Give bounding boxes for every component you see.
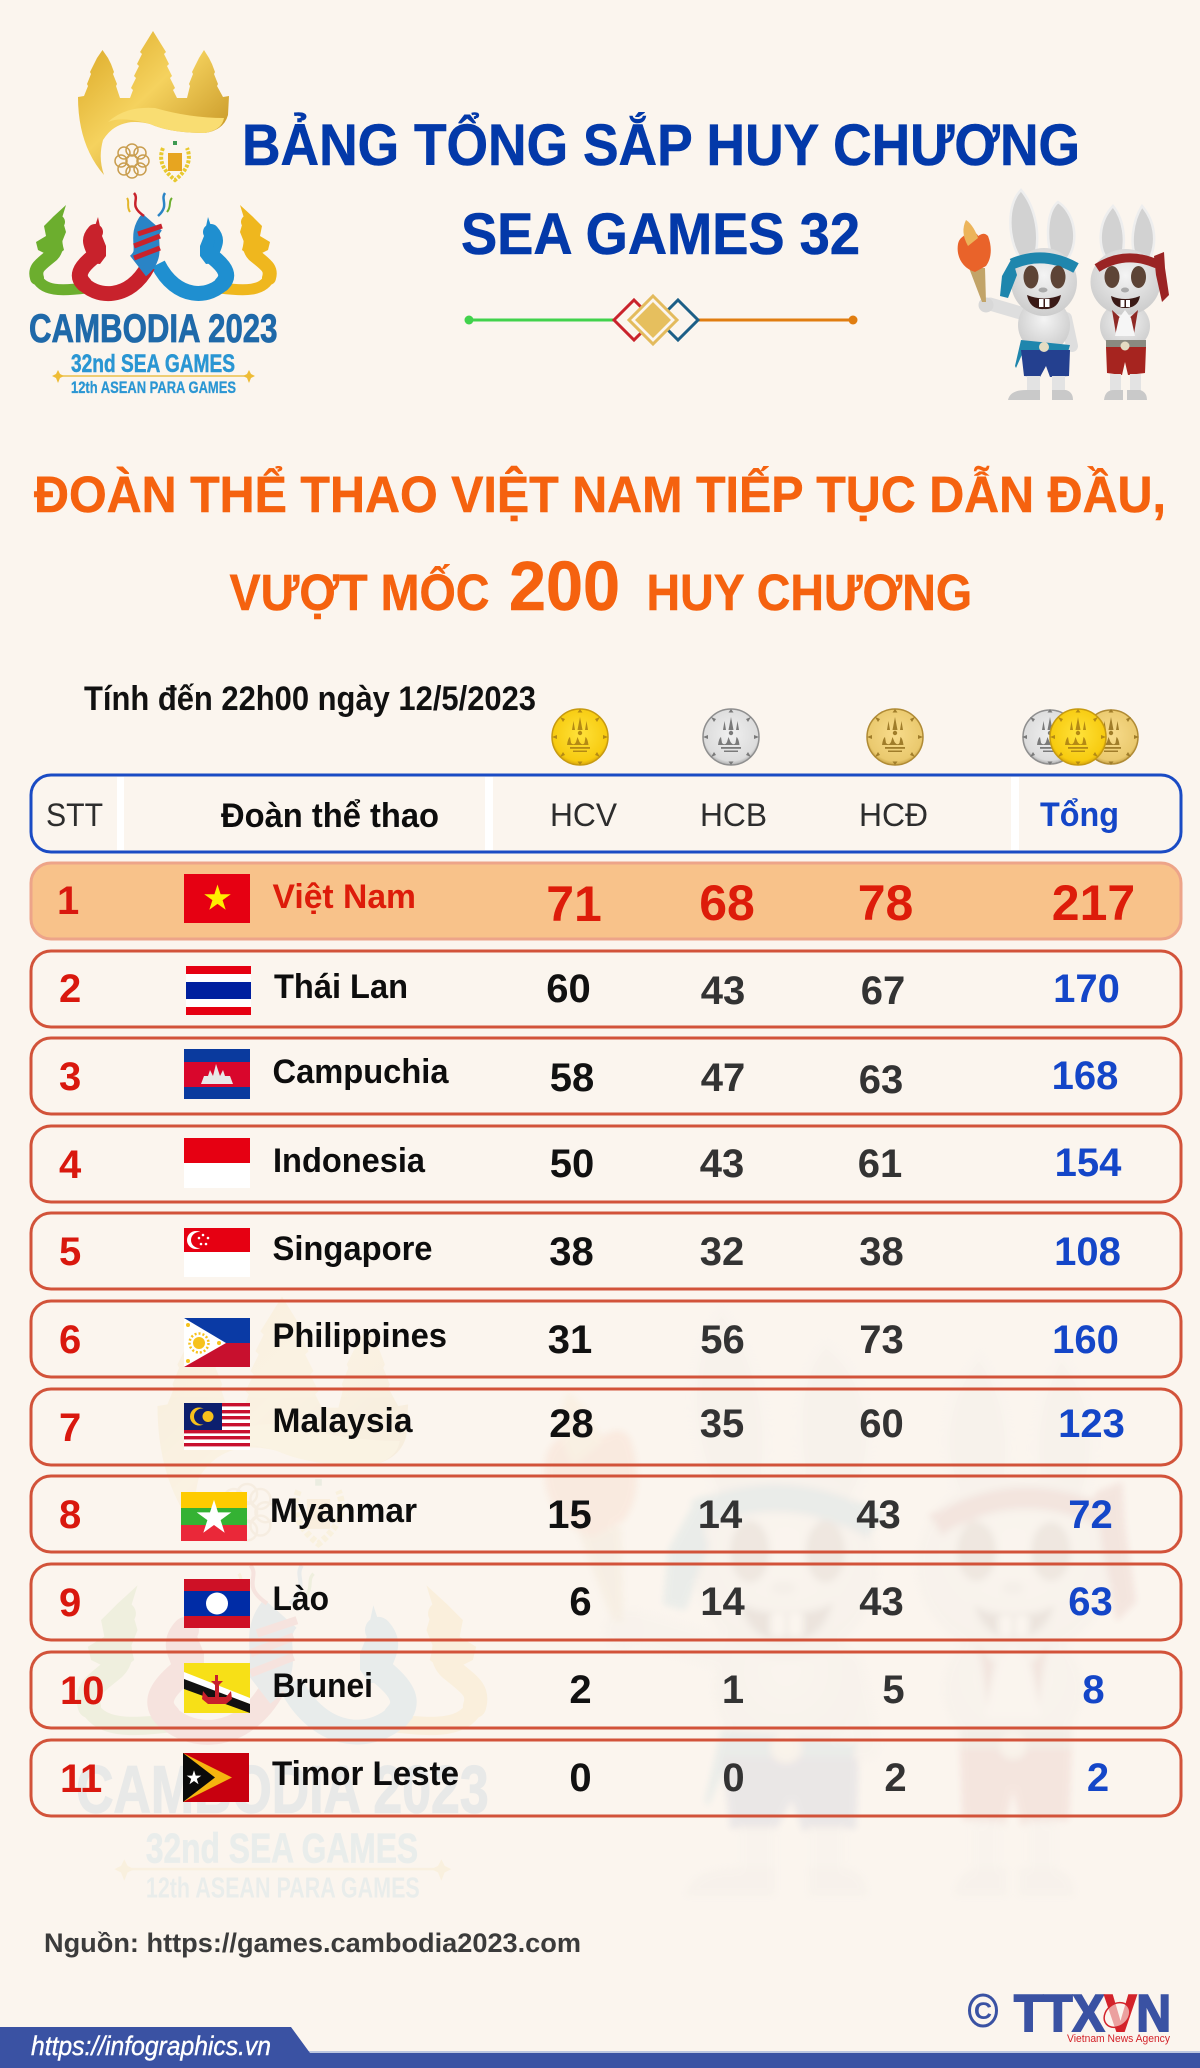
row 11: Timor Leste: 2	[1087, 1756, 1109, 1800]
row 3: Campuchia	[31, 1038, 1181, 1114]
row 6: Philippines: 73	[859, 1318, 904, 1362]
row 10: Brunei: 2	[569, 1668, 592, 1712]
mascots	[958, 190, 1169, 400]
row 10: Brunei: 5	[882, 1668, 905, 1712]
row 6: Philippines: 31	[548, 1318, 592, 1362]
icon: bronze medal	[867, 709, 923, 765]
row 7: Malaysia: 60	[859, 1402, 904, 1446]
watermark: faint logo: CAMBODIA 2023	[76, 1754, 489, 1828]
row 4: Indonesia: 61	[858, 1142, 902, 1186]
flag: Singapore	[184, 1228, 250, 1277]
footer band: https://infographics.vn	[31, 2031, 271, 2061]
row 9: Lào: 63	[1068, 1580, 1113, 1624]
row 3: Campuchia: 58	[550, 1056, 594, 1100]
source note: Nguồn: https://games.cambodia2023.com	[44, 1928, 581, 1958]
title: SEA GAMES 32	[461, 202, 860, 267]
logo: Cambodia 2023	[29, 31, 278, 397]
row 7: Malaysia	[31, 1389, 1181, 1465]
row 5: Singapore: 38	[549, 1230, 594, 1274]
logo: Cambodia 2023: CAMBODIA 2023	[29, 307, 278, 351]
date note: Tính đến 22h00 ngày 12/5/2023	[84, 680, 536, 718]
row 5: Singapore: 38	[859, 1230, 904, 1274]
flag: Myanmar	[181, 1492, 247, 1541]
row 11: Timor Leste: 11	[60, 1757, 102, 1801]
title divider ornament	[464, 296, 858, 344]
row 5: Singapore: 5	[59, 1230, 81, 1274]
row 7: Malaysia: 35	[700, 1402, 744, 1446]
row 8: Myanmar: 14	[698, 1493, 743, 1537]
row 10: Brunei: 10	[60, 1669, 104, 1713]
row 8: Myanmar: 43	[856, 1493, 901, 1537]
icon: gold medal	[552, 709, 608, 765]
row 6: Philippines: 56	[700, 1318, 745, 1362]
row 8: Myanmar: Myanmar	[270, 1492, 417, 1530]
flag: Indonesia	[184, 1138, 250, 1188]
row 5: Singapore: Singapore	[272, 1230, 432, 1268]
row 10: Brunei: Brunei	[272, 1667, 373, 1705]
flag: Philippines	[184, 1318, 250, 1367]
row 1: Việt Nam: 78	[858, 875, 913, 931]
row 3: Campuchia: 3	[59, 1055, 81, 1099]
row 7: Malaysia: Malaysia	[272, 1402, 414, 1440]
row 1: Việt Nam: 217	[1052, 875, 1135, 931]
row 6: Philippines: 160	[1052, 1318, 1119, 1362]
row 2: Thái Lan: Thái Lan	[274, 968, 408, 1006]
row 9: Lào	[31, 1564, 1181, 1640]
row 11: Timor Leste	[31, 1740, 1181, 1816]
row 11: Timor Leste: 0	[569, 1756, 592, 1800]
watermark: faint logo	[76, 1296, 489, 1903]
title: BẢNG TỔNG SẮP HUY CHƯƠNG	[242, 113, 1080, 178]
row 4: Indonesia: 154	[1055, 1141, 1122, 1185]
table	[31, 775, 1181, 1816]
footer band	[0, 2027, 1200, 2068]
flag: Vietnam	[184, 874, 250, 923]
title	[242, 113, 1080, 267]
row 4: Indonesia: 4	[59, 1143, 82, 1187]
table header	[31, 775, 1181, 852]
row 11: Timor Leste: 0	[722, 1756, 745, 1800]
icon: three medals for total	[1022, 709, 1139, 765]
row 4: Indonesia	[31, 1126, 1181, 1202]
row 2: Thái Lan: 60	[546, 967, 591, 1011]
flag: Malaysia	[184, 1403, 250, 1450]
row 7: Malaysia: 7	[59, 1406, 81, 1450]
TTXVN logo: C	[974, 1998, 992, 2025]
flag: Laos	[184, 1579, 250, 1628]
row 2: Thái Lan: 170	[1053, 967, 1120, 1011]
flag: Timor Leste	[183, 1753, 249, 1802]
row 4: Indonesia: 43	[700, 1142, 744, 1186]
row 6: Philippines	[31, 1301, 1181, 1377]
flag: Cambodia	[184, 1049, 250, 1099]
watermark: faint logo: 12th ASEAN PARA GAMES	[146, 1871, 420, 1903]
row 9: Lào: 43	[859, 1580, 904, 1624]
row 5: Singapore	[31, 1213, 1181, 1289]
row 9: Lào: 14	[700, 1580, 745, 1624]
row 9: Lào: 6	[569, 1580, 592, 1624]
headline: 200	[509, 547, 620, 625]
table header: Tổng	[1040, 796, 1119, 834]
row 1: Việt Nam	[31, 863, 1181, 939]
row 9: Lào: Lào	[272, 1580, 329, 1618]
table header: STT	[46, 797, 103, 833]
row 3: Campuchia: 168	[1052, 1054, 1118, 1098]
row 7: Malaysia: 123	[1058, 1402, 1125, 1446]
row 11: Timor Leste: 2	[884, 1756, 907, 1800]
logo: Cambodia 2023: 32nd SEA GAMES	[71, 350, 235, 378]
row 1: Việt Nam: 71	[546, 876, 602, 932]
headline: ĐOÀN THỂ THAO VIỆT NAM TIẾP TỤC DẪN ĐẦU,	[34, 465, 1166, 523]
headline: HUY CHƯƠNG	[646, 564, 972, 621]
TTXVN logo: TTXVN	[1014, 1985, 1171, 2043]
row 8: Myanmar: 8	[59, 1493, 81, 1537]
row 2: Thái Lan: 2	[59, 967, 81, 1011]
row 8: Myanmar	[31, 1476, 1181, 1552]
watermark: faint mascots	[544, 1308, 1136, 1896]
headline: VƯỢT MỐC	[230, 563, 490, 621]
table header: HCV	[550, 797, 618, 833]
row 5: Singapore: 108	[1054, 1230, 1121, 1274]
row 3: Campuchia: 63	[859, 1058, 903, 1102]
watermark: faint logo: 32nd SEA GAMES	[146, 1825, 418, 1872]
row 6: Philippines: 6	[59, 1318, 81, 1362]
row 9: Lào: 9	[59, 1581, 81, 1625]
row 4: Indonesia: Indonesia	[273, 1142, 426, 1180]
flag: Brunei	[184, 1663, 250, 1713]
row 1: Việt Nam: 1	[57, 879, 79, 923]
row 2: Thái Lan	[31, 951, 1181, 1027]
row 6: Philippines: Philippines	[272, 1317, 447, 1355]
flag: Thailand	[186, 966, 251, 1015]
row 4: Indonesia: 50	[550, 1142, 594, 1186]
TTXVN logo: Vietnam News Agency	[1067, 2033, 1170, 2045]
row 11: Timor Leste: Timor Leste	[272, 1755, 459, 1793]
row 10: Brunei: 1	[722, 1668, 744, 1712]
row 3: Campuchia: Campuchia	[272, 1053, 450, 1091]
row 3: Campuchia: 47	[701, 1056, 745, 1100]
row 1: Việt Nam: 68	[699, 875, 755, 931]
row 10: Brunei: 8	[1082, 1668, 1105, 1712]
row 1: Việt Nam: Việt Nam	[272, 878, 416, 916]
row 5: Singapore: 32	[700, 1230, 744, 1274]
row 2: Thái Lan: 67	[861, 969, 905, 1013]
table header: Đoàn thể thao	[221, 797, 439, 835]
table header: HCĐ	[859, 797, 928, 833]
logo: Cambodia 2023: 12th ASEAN PARA GAMES	[71, 378, 236, 397]
row 7: Malaysia: 28	[549, 1402, 594, 1446]
row 10: Brunei	[31, 1652, 1181, 1728]
headline	[34, 465, 1166, 625]
row 2: Thái Lan: 43	[701, 969, 745, 1013]
table header: HCB	[700, 797, 767, 833]
row 8: Myanmar: 72	[1068, 1493, 1113, 1537]
icon: silver medal	[703, 709, 759, 765]
row 8: Myanmar: 15	[547, 1493, 592, 1537]
